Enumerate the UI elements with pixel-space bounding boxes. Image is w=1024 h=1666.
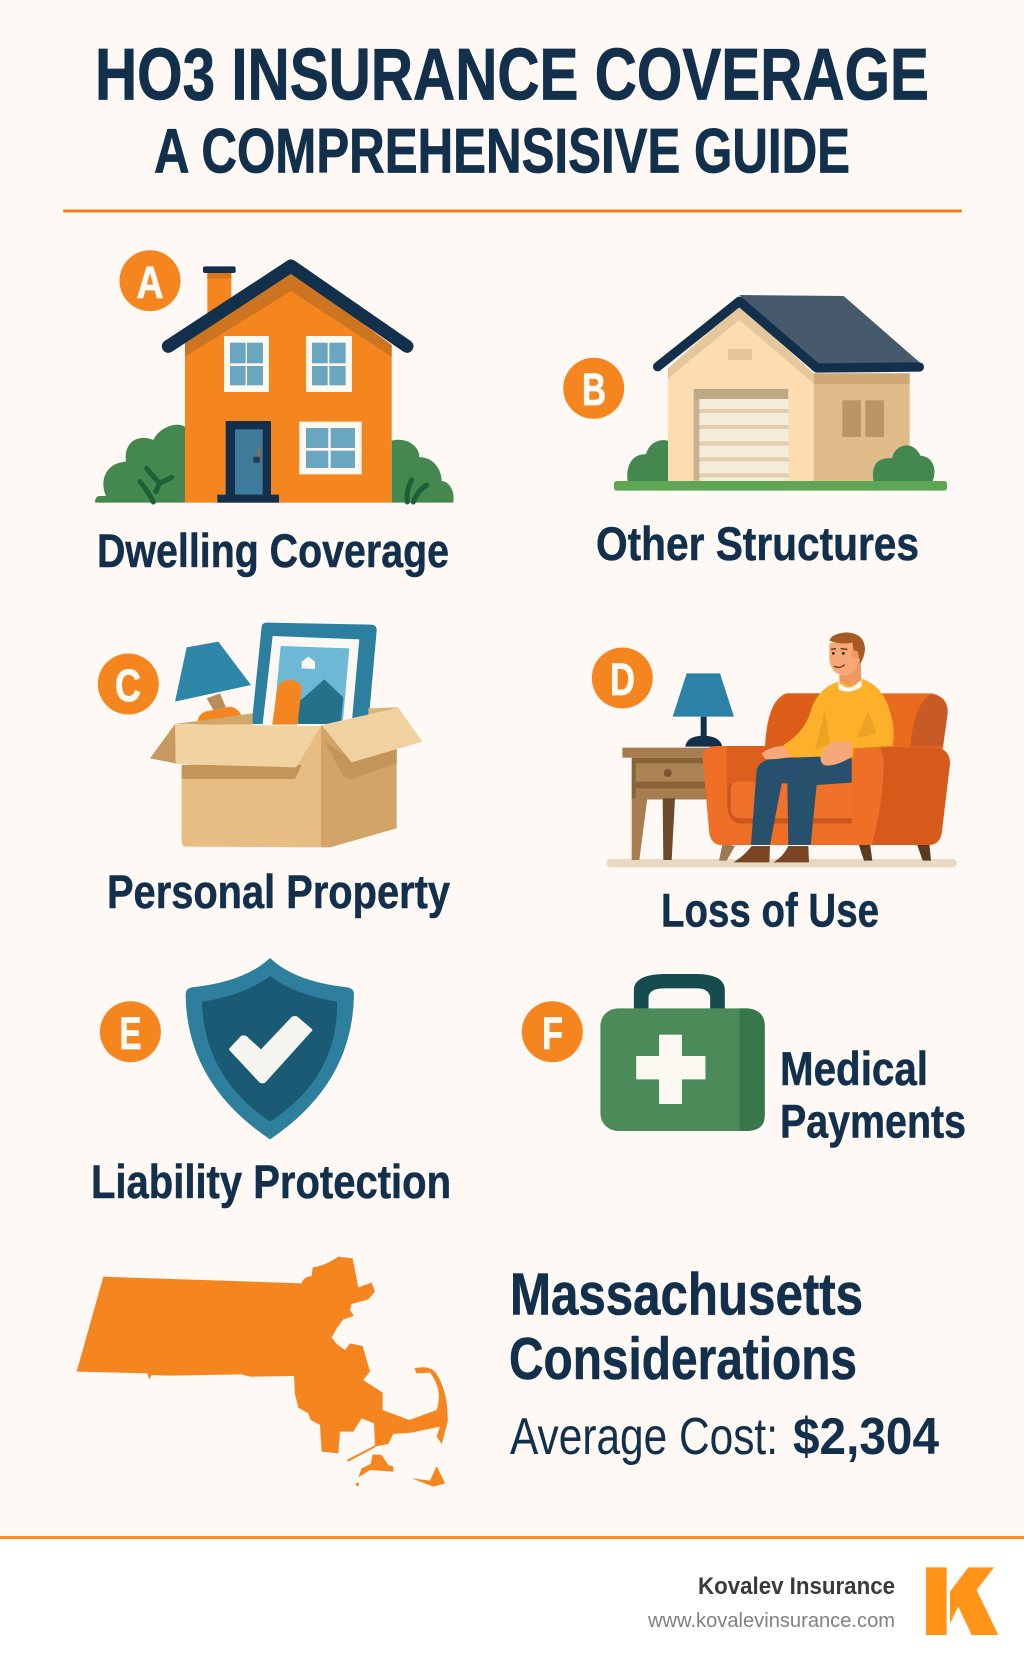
label: personal property: Personal Property [107, 865, 450, 918]
icon: massachusetts map [77, 1257, 448, 1487]
stat: average cost: $2,304 [793, 1408, 939, 1466]
icon: first aid kit [600, 974, 765, 1131]
footer [0, 1536, 1024, 1666]
badge: A [120, 250, 180, 311]
footer brand name: Kovalev Insurance [698, 1573, 895, 1600]
badge: B: B [582, 364, 606, 415]
panel: dwelling coverage [95, 250, 454, 577]
badge: A: A [136, 257, 164, 308]
icon: garage [614, 295, 947, 491]
badge: F: F [542, 1008, 563, 1059]
footer url: www.kovalevinsurance.com [647, 1609, 895, 1632]
icon: person on sofa [607, 632, 957, 867]
badge: C: C [115, 660, 141, 711]
label: medical payments [780, 1042, 966, 1148]
icon: shield [186, 958, 354, 1139]
title: A COMPREHENSISIVE GUIDE [154, 116, 850, 186]
badge: E: E [120, 1008, 142, 1059]
label: liability protection: Liability Protection [91, 1155, 451, 1208]
heading: massachusetts considerations [509, 1262, 863, 1392]
panel: personal property [98, 623, 450, 918]
panel: massachusetts considerations [77, 1257, 939, 1487]
label: other structures: Other Structures [596, 517, 919, 570]
logo: K mark [926, 1567, 998, 1635]
label: medical payments: Payments [780, 1095, 966, 1148]
badge: E [100, 1001, 161, 1062]
label: medical payments: Medical [780, 1042, 928, 1095]
title [95, 34, 929, 186]
panel: medical payments [522, 974, 966, 1148]
icon: moving box [150, 623, 422, 847]
heading: massachusetts considerations: Considerations [509, 1326, 857, 1392]
panel: liability protection [91, 958, 451, 1208]
badge: D [592, 648, 653, 708]
panel: loss of use [592, 632, 957, 937]
badge: D: D [610, 654, 635, 705]
badge: C [98, 654, 159, 714]
panel: other structures [563, 295, 947, 570]
badge: F [522, 1001, 583, 1062]
icon: orange house [95, 266, 454, 503]
heading: massachusetts considerations: Massachusetts [510, 1262, 863, 1328]
label: loss of use: Loss of Use [661, 884, 879, 937]
badge: B [563, 358, 624, 419]
label: dwelling coverage: Dwelling Coverage [97, 524, 449, 577]
stat: average cost: Average Cost: [510, 1408, 778, 1466]
